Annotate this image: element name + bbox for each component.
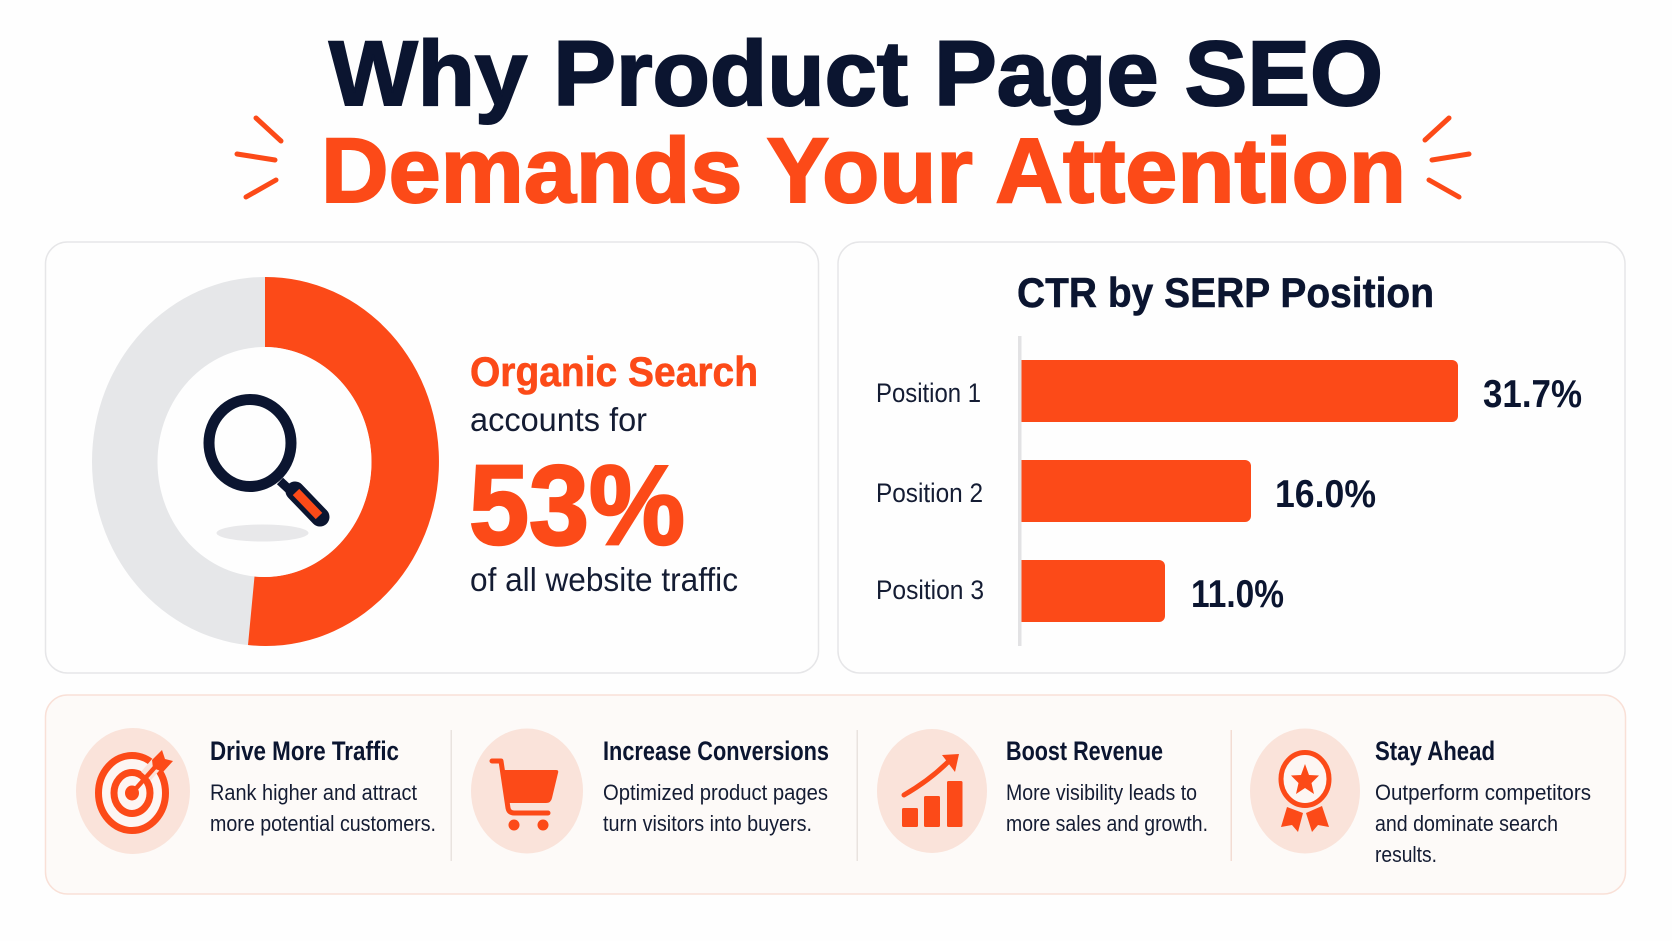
title: Demands Your Attention	[321, 120, 1406, 222]
description: stay ahead: Outperform competitors	[1375, 780, 1591, 805]
panel: organic search share	[46, 242, 818, 673]
description: drive more traffic	[210, 780, 436, 836]
chart title: CTR by SERP Position	[1017, 269, 1434, 316]
bar: position 3: Position 3	[876, 575, 984, 605]
donut chart: 53 percent	[92, 277, 439, 646]
bar: position 2: 16.0%	[1275, 473, 1376, 516]
icon: left emphasis sparks	[237, 118, 281, 197]
heading: stay ahead: Stay Ahead	[1375, 736, 1495, 766]
heading: drive more traffic: Drive More Traffic	[210, 736, 399, 766]
bar: position 2	[876, 460, 1376, 522]
stat: 53 percent: 53%	[469, 442, 685, 568]
bar: position 3: 11.0%	[1191, 573, 1284, 616]
bar chart	[876, 336, 1582, 646]
benefit: increase conversions	[471, 728, 829, 854]
description: increase conversions: turn visitors into buyers.	[603, 811, 812, 836]
icon: right emphasis sparks	[1425, 118, 1469, 197]
icon: shopping cart	[471, 728, 583, 854]
title	[321, 23, 1406, 222]
bar: position 3	[876, 560, 1284, 622]
icon: award ribbon	[1250, 728, 1360, 854]
panel: CTR by SERP position	[838, 242, 1625, 673]
description: drive more traffic: Rank higher and attract	[210, 780, 417, 805]
bar: position 1: 31.7%	[1483, 373, 1582, 416]
heading: boost revenue: Boost Revenue	[1006, 736, 1163, 766]
text: organic search heading: Organic Search	[470, 348, 758, 395]
icon: magnifying glass	[209, 400, 320, 542]
description: increase conversions: Optimized product pages	[603, 780, 828, 805]
benefit: boost revenue	[877, 729, 1208, 853]
description: stay ahead	[1375, 780, 1591, 867]
description: boost revenue: More visibility leads to	[1006, 780, 1197, 805]
bar: position 1: Position 1	[876, 378, 981, 408]
bar: position 1	[876, 360, 1582, 422]
icon: target with arrow	[76, 728, 190, 854]
panel: benefits	[46, 695, 1626, 894]
description: boost revenue	[1006, 780, 1208, 836]
description: stay ahead: and dominate search	[1375, 811, 1558, 836]
bar: position 2: Position 2	[876, 478, 983, 508]
heading: increase conversions: Increase Conversions	[603, 736, 829, 766]
text: accounts for: accounts for	[470, 401, 647, 438]
text: of all website traffic: of all website traffic	[470, 561, 738, 598]
benefit: drive more traffic	[76, 728, 436, 854]
benefit: stay ahead	[1250, 728, 1591, 867]
description: drive more traffic: more potential customers.	[210, 811, 436, 836]
description: increase conversions	[603, 780, 828, 836]
icon: growth chart with arrow	[877, 729, 987, 853]
description: stay ahead: results.	[1375, 842, 1437, 867]
title: Why Product Page SEO	[329, 23, 1383, 125]
description: boost revenue: more sales and growth.	[1006, 811, 1208, 836]
